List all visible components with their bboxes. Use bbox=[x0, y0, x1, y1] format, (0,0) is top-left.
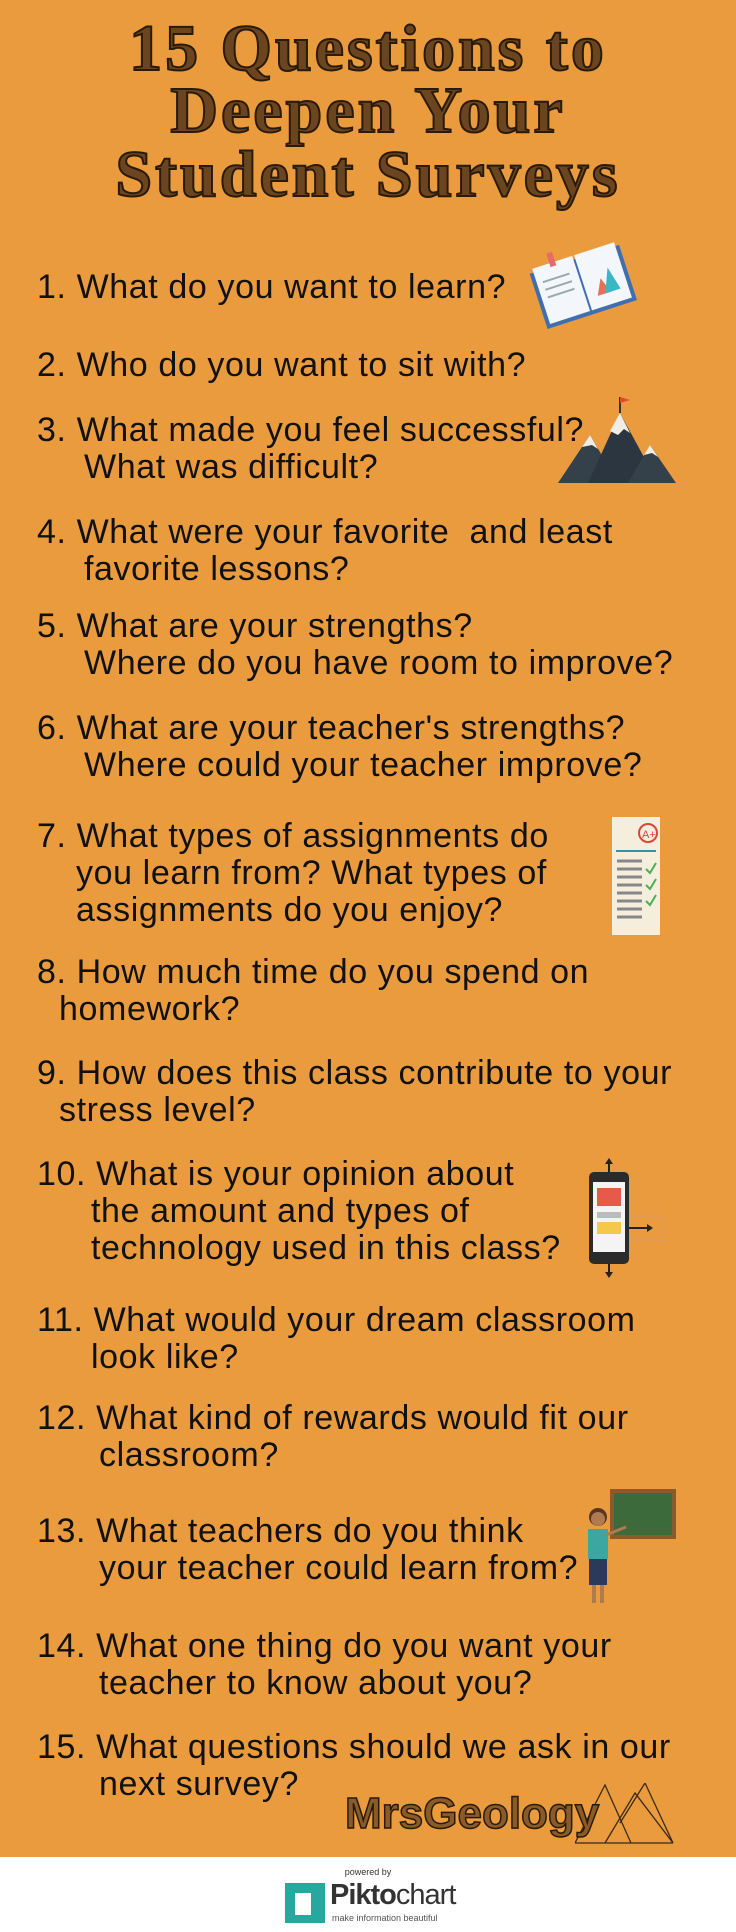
question 7: assignments do you enjoy? bbox=[76, 891, 503, 929]
question 10: the amount and types of bbox=[91, 1192, 470, 1230]
question 8: 8. How much time do you spend on bbox=[37, 953, 589, 991]
icon: book bbox=[530, 242, 637, 329]
logo: MrsGeology bbox=[345, 1783, 674, 1844]
question 3: 3. What made you feel successful? bbox=[37, 411, 584, 449]
question 12 bbox=[37, 1399, 629, 1474]
question 3: What was difficult? bbox=[84, 448, 378, 486]
question 7: you learn from? What types of bbox=[76, 854, 547, 892]
question 15: 15. What questions should we ask in our bbox=[37, 1728, 671, 1766]
question 7: 7. What types of assignments do bbox=[37, 817, 549, 855]
icon: mountains bbox=[558, 397, 676, 483]
question 9 bbox=[37, 1054, 672, 1129]
question 13 bbox=[37, 1512, 578, 1587]
question 11 bbox=[37, 1301, 636, 1376]
question 14: 14. What one thing do you want your bbox=[37, 1627, 612, 1665]
question 9: stress level? bbox=[59, 1091, 256, 1129]
question 12: classroom? bbox=[99, 1436, 279, 1474]
question 14 bbox=[37, 1627, 612, 1702]
icon: teacher at chalkboard bbox=[588, 1489, 676, 1603]
footer: Piktochart: make information beautiful bbox=[332, 1913, 438, 1923]
question 10: technology used in this class? bbox=[91, 1229, 561, 1267]
footer: Piktochart: Piktochart bbox=[330, 1879, 455, 1911]
question 11: 11. What would your dream classroom bbox=[37, 1301, 636, 1339]
question 11: look like? bbox=[91, 1338, 239, 1376]
question 5 bbox=[37, 607, 673, 682]
question 4: 4. What were your favorite and least bbox=[37, 513, 613, 551]
question 6: Where could your teacher improve? bbox=[84, 746, 642, 784]
question 4: favorite lessons? bbox=[84, 550, 349, 588]
question 8 bbox=[37, 953, 589, 1028]
question 2: 2. Who do you want to sit with? bbox=[37, 346, 526, 384]
question 14: teacher to know about you? bbox=[99, 1664, 532, 1702]
question 3 bbox=[37, 411, 584, 486]
question 4 bbox=[37, 513, 613, 588]
title: Student Surveys bbox=[115, 138, 621, 211]
question 15 bbox=[37, 1728, 671, 1803]
question 13: your teacher could learn from? bbox=[99, 1549, 578, 1587]
question 6: 6. What are your teacher's strengths? bbox=[37, 709, 625, 747]
question 15: next survey? bbox=[99, 1765, 299, 1803]
title: Deepen Your bbox=[170, 74, 566, 147]
question 10 bbox=[37, 1155, 561, 1267]
icon: graded sheet bbox=[612, 817, 660, 935]
question 6 bbox=[37, 709, 642, 784]
logo: MrsGeology: MrsGeology bbox=[345, 1789, 599, 1838]
question 13: 13. What teachers do you think bbox=[37, 1512, 524, 1550]
question 5: 5. What are your strengths? bbox=[37, 607, 473, 645]
question 5: Where do you have room to improve? bbox=[84, 644, 673, 682]
title: 15 Questions to bbox=[129, 12, 607, 85]
question 1: 1. What do you want to learn? bbox=[37, 268, 506, 306]
question 12: 12. What kind of rewards would fit our bbox=[37, 1399, 629, 1437]
icon: phone bbox=[589, 1158, 664, 1278]
question 7 bbox=[37, 817, 549, 929]
footer: Piktochart: powered by bbox=[345, 1867, 391, 1877]
footer: Piktochart bbox=[0, 1857, 736, 1932]
title bbox=[115, 12, 621, 211]
question 10: 10. What is your opinion about bbox=[37, 1155, 514, 1193]
question 8: homework? bbox=[59, 990, 240, 1028]
icon: graded sheet: A+ bbox=[642, 829, 656, 841]
question 9: 9. How does this class contribute to your bbox=[37, 1054, 672, 1092]
